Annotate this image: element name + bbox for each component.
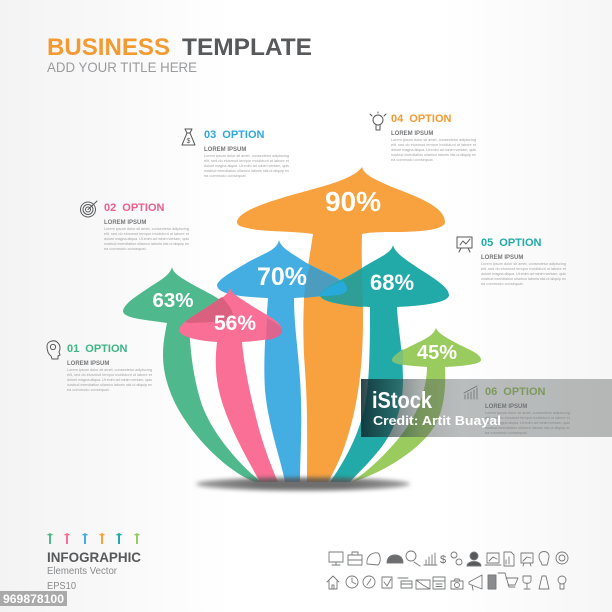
option 06: dolore magna aliqua. Ut enim ad minim veniam, quis (485, 420, 570, 425)
option 06: 06 OPTION (485, 386, 546, 398)
option 05: dolore magna aliqua. Ut enim ad minim veniam, quis (481, 271, 566, 276)
icon: user (467, 552, 481, 566)
option 04: ea commodo consequat. (391, 157, 434, 162)
option 05: ea commodo consequat. (481, 281, 524, 286)
label: 90%: 90% (325, 186, 381, 217)
icon: people (387, 555, 403, 563)
option 01: nostrud exercitation ullamco laboris nisi ut aliquip ex (67, 382, 152, 387)
label: 45%: 45% (417, 342, 457, 364)
icon: target (80, 201, 97, 217)
icon: bag (539, 576, 549, 589)
arrow: teal 68% (320, 245, 449, 482)
watermark banner: Credit: Artit Buayal (373, 413, 501, 428)
overlap: teal and blue (320, 281, 347, 296)
option 01: dolore magna aliqua. Ut enim ad minim veniam, quis (67, 377, 152, 382)
label: 70%: 70% (257, 263, 307, 291)
arrow: pink 56% (179, 288, 282, 482)
option 02: dolore magna aliqua. Ut enim ad minim veniam, quis (104, 236, 189, 241)
option 04: nostrud exercitation ullamco laboris nisi ut aliquip ex (391, 152, 476, 157)
option 01: elit, sed do eiusmod tempor incididunt ut labore et (67, 372, 153, 377)
overlap: pink over blue (266, 318, 282, 340)
infographic caption: Elements Vector (47, 566, 118, 577)
icon: head (539, 552, 549, 565)
option 02: nostrud exercitation ullamco laboris nisi ut aliquip ex (104, 241, 189, 246)
icon: gears (451, 552, 462, 565)
option 01: ea commodo consequat. (67, 387, 110, 392)
infographic caption (47, 549, 141, 592)
option 01: 01 OPTION (67, 343, 128, 355)
icon: monitor (329, 552, 343, 565)
icon: calendar (433, 577, 445, 589)
option 06 (464, 386, 571, 435)
label: 56%: 56% (214, 312, 256, 335)
option 06: Lorem ipsum dolor sit amet, consectetur adipiscing (485, 410, 570, 415)
option 03: Lorem ipsum dolor sit amet, consectetur adipiscing (204, 153, 289, 158)
icon: money bag (182, 129, 195, 145)
option 03: $ (187, 138, 191, 145)
arrow: green 63% (123, 267, 261, 482)
infographic caption: INFOGRAPHIC (47, 549, 141, 565)
icon: cloud shapes (367, 553, 380, 565)
icon: checkbox (382, 577, 392, 588)
title: TEMPLATE (182, 34, 312, 61)
icon: cart (498, 573, 518, 587)
option 02: Lorem ipsum dolor sit amet, consectetur adipiscing (104, 226, 189, 231)
icon: presentation board (457, 237, 472, 252)
option 04: LOREM IPSUM (391, 131, 433, 137)
mushroom arrow chart (123, 167, 481, 482)
icon: bars (424, 553, 437, 565)
overlap: teal over orange (320, 268, 363, 307)
option 06: nostrud exercitation ullamco laboris nisi ut aliquip ex (485, 425, 570, 430)
option 03: 03 OPTION (204, 129, 265, 141)
icon: bar chart (464, 386, 477, 399)
option 06: ea commodo consequat. (485, 430, 528, 435)
option 04 (370, 112, 477, 162)
option 02: 02 OPTION (104, 202, 165, 214)
icon: board (521, 553, 533, 566)
option 03: dolore magna aliqua. Ut enim ad minim veniam, quis (204, 163, 289, 168)
icon: briefcase (348, 552, 362, 565)
arrow: lime 45% (352, 328, 481, 482)
option 05: nostrud exercitation ullamco laboris nisi ut aliquip ex (481, 276, 566, 281)
icon: trophy (523, 576, 531, 589)
icon strip (327, 551, 568, 590)
icon: envelope (416, 580, 430, 589)
option 04: Lorem ipsum dolor sit amet, consectetur adipiscing (391, 137, 476, 142)
ground shadow (196, 478, 410, 490)
option 03: elit, sed do eiusmod tempor incididunt ut labore et (204, 158, 290, 163)
option 05: LOREM IPSUM (481, 255, 523, 261)
overlap: pink over green (185, 297, 233, 323)
label: 63%: 63% (152, 289, 194, 312)
title: BUSINESS (47, 34, 170, 61)
option 04: dolore magna aliqua. Ut enim ad minim veniam, quis (391, 147, 476, 152)
infographic caption: EPS10 (47, 581, 76, 592)
option 06: elit, sed do eiusmod tempor incididunt ut labore et (485, 415, 571, 420)
arrow: orange 90% (237, 167, 445, 482)
icon: phone (488, 575, 496, 589)
option 01 (47, 341, 153, 392)
overlap: blue over orange (304, 265, 345, 298)
subtitle: ADD YOUR TITLE HERE (47, 59, 197, 75)
option 01: Lorem ipsum dolor sit amet, consectetur adipiscing (67, 367, 152, 372)
icon: dart target (556, 552, 568, 564)
label: 68%: 68% (370, 270, 414, 295)
option 03 (182, 129, 290, 178)
option 05: Lorem ipsum dolor sit amet, consectetur adipiscing (481, 261, 566, 266)
option 04: 04 OPTION (391, 113, 452, 125)
option 03: ea commodo consequat. (204, 173, 247, 178)
option 06: LOREM IPSUM (485, 404, 527, 410)
option 04: elit, sed do eiusmod tempor incididunt ut labore et (391, 142, 477, 147)
option 01: LOREM IPSUM (67, 361, 109, 367)
option 02: elit, sed do eiusmod tempor incididunt ut labore et (104, 231, 190, 236)
icon: camera (451, 579, 463, 589)
option 03: LOREM IPSUM (204, 147, 246, 153)
icon: megaphone (469, 575, 482, 590)
icon: refresh (363, 576, 375, 588)
option 02: LOREM IPSUM (104, 220, 146, 226)
overlap: lime over teal (392, 349, 403, 365)
icon: cards (398, 578, 412, 588)
title (47, 34, 312, 61)
icon: bulb (558, 576, 566, 589)
option 02: ea commodo consequat. (104, 246, 147, 251)
watermark banner (361, 379, 612, 437)
option 03: nostrud exercitation ullamco laboris nisi ut aliquip ex (204, 168, 289, 173)
option 05 (457, 237, 567, 286)
icon: clock (346, 576, 358, 588)
option 05: elit, sed do eiusmod tempor incididunt ut labore et (481, 266, 567, 271)
icon: light bulb (370, 112, 386, 130)
icon: document (504, 552, 514, 566)
arrow: blue 70% (217, 240, 347, 482)
option 02 (80, 201, 190, 251)
small arrow legend (46, 533, 140, 544)
watermark banner: iStock (372, 387, 432, 413)
icon: magnifier (406, 551, 420, 566)
stock id strip: 969878100 (3, 592, 64, 606)
icon: home (327, 576, 339, 589)
icon: dollar: $ (440, 554, 446, 566)
icon: laptop chart (485, 553, 501, 565)
option 05: 05 OPTION (481, 237, 542, 249)
icon: head with gear (47, 341, 60, 359)
